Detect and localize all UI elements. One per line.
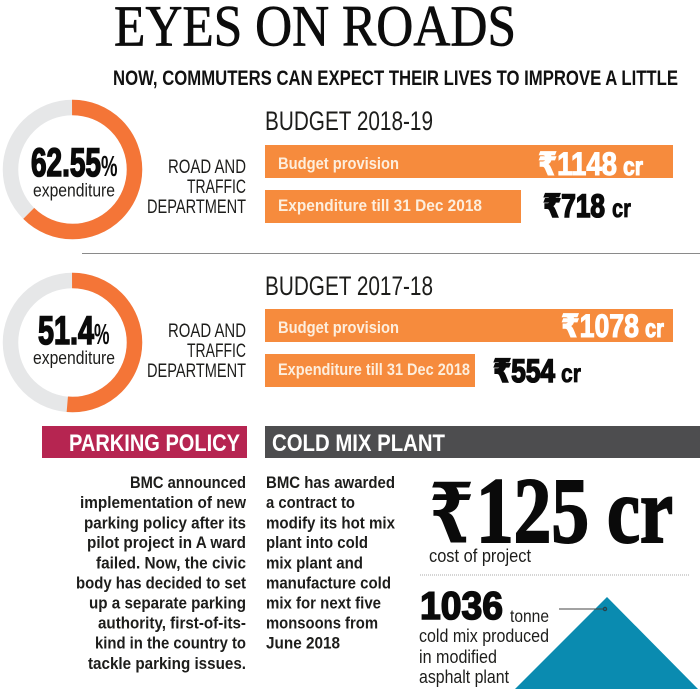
text block: cold mix plant: modify its hot mix <box>266 514 395 532</box>
text block: parking policy: failed. Now, the civic <box>96 554 246 572</box>
icon: asphalt pile triangle <box>515 597 698 689</box>
bar: budget provision 1148 cr: ₹1148 <box>538 146 617 182</box>
text block: cold mix plant: BMC has awarded <box>266 473 395 492</box>
department label: DEPARTMENT <box>147 361 246 382</box>
text block: parking policy: parking policy after its <box>84 514 246 532</box>
text block: cold mix plant: manufacture cold <box>266 574 391 592</box>
donut chart: 51.4% expenditure: 51.4 <box>38 309 95 353</box>
text block: cold mix plant: a contract to <box>266 493 355 512</box>
text block: cold mix plant <box>266 473 395 652</box>
department label <box>147 157 246 218</box>
stat: project cost: cr <box>607 460 673 563</box>
panel: budget 2018-19 <box>10 106 673 232</box>
text block: parking policy: BMC announced <box>130 473 246 492</box>
text block: parking policy: up a separate parking <box>89 594 246 612</box>
text block: cold mix plant: mix for next five <box>266 594 381 612</box>
panel: budget 2017-18 <box>10 271 673 404</box>
text block: parking policy: pilot project in A ward <box>87 533 246 552</box>
text block: cold mix plant: monsoons from <box>266 614 378 632</box>
bar: expenditure 554 cr: Expenditure till 31 Dec 2018 <box>278 360 470 379</box>
heading: cold mix plant: COLD MIX PLANT <box>272 430 445 457</box>
text block: parking policy: authority, first-of-its- <box>98 614 246 632</box>
bar: expenditure 718 cr <box>265 188 631 224</box>
text block: parking policy <box>76 473 247 673</box>
department label: TRAFFIC <box>187 177 246 198</box>
bar: expenditure 554 cr: ₹554 <box>493 353 555 389</box>
heading: budget 2017-18: BUDGET 2017-18 <box>265 271 433 301</box>
donut chart: 51.4% expenditure: % <box>94 319 110 351</box>
leader line <box>559 607 607 611</box>
donut chart: 62.55% expenditure: expenditure <box>33 180 115 200</box>
bar: budget provision 1148 cr: cr <box>623 151 643 181</box>
department label <box>147 321 246 382</box>
bar: expenditure 718 cr: cr <box>612 193 631 223</box>
panel: cold mix plant <box>265 426 700 689</box>
department label: TRAFFIC <box>187 341 246 362</box>
heading: cold mix plant <box>265 426 700 458</box>
donut chart: 62.55% expenditure: % <box>101 151 118 183</box>
stat: cold mix tonnage: cold mix produced <box>419 625 549 646</box>
heading: parking policy <box>42 426 247 458</box>
department label: ROAD AND <box>168 157 246 178</box>
department label: DEPARTMENT <box>147 197 246 218</box>
bar: budget provision 1078 cr <box>265 308 673 344</box>
bar: expenditure 554 cr: cr <box>561 358 581 388</box>
stat: project cost: ₹ <box>430 469 473 560</box>
text block: parking policy: body has decided to set <box>76 574 246 592</box>
stat: project cost: cost of project <box>429 545 531 566</box>
donut chart: 62.55% expenditure: 62.55 <box>31 141 101 185</box>
bar: budget provision 1078 cr: ₹1078 <box>561 308 639 344</box>
bar: expenditure 718 cr: ₹718 <box>543 188 605 224</box>
bar: budget provision 1078 cr: Budget provision <box>278 318 399 337</box>
donut chart: 51.4% expenditure <box>10 280 134 404</box>
stat: cold mix tonnage <box>419 585 549 687</box>
stat: project cost: 125 <box>476 460 589 563</box>
text block: cold mix plant: June 2018 <box>266 634 340 652</box>
text block: parking policy: tackle parking issues. <box>88 654 246 673</box>
stat: project cost <box>429 460 673 566</box>
bar: budget provision 1078 cr: cr <box>645 313 664 343</box>
bar: budget provision 1148 cr <box>265 145 673 182</box>
bar: expenditure 554 cr <box>265 353 581 389</box>
panel: parking policy <box>42 426 247 673</box>
text block: cold mix plant: mix plant and <box>266 554 363 572</box>
text block: cold mix plant: plant into cold <box>266 533 368 552</box>
stat: cold mix tonnage: in modified <box>419 646 497 667</box>
donut chart: 51.4% expenditure: expenditure <box>33 348 115 368</box>
bar: budget provision 1148 cr: Budget provision <box>278 154 399 173</box>
department label: ROAD AND <box>168 321 246 342</box>
heading: parking policy: PARKING POLICY <box>69 430 240 457</box>
text block: parking policy: implementation of new <box>80 493 247 512</box>
heading: budget 2018-19: BUDGET 2018-19 <box>265 106 433 136</box>
bar: expenditure 718 cr: Expenditure till 31 Dec 2018 <box>278 196 482 215</box>
stat: cold mix tonnage: tonne <box>510 606 549 626</box>
stat: cold mix tonnage: 1036 <box>420 585 503 628</box>
donut chart: 62.55% expenditure <box>10 108 134 232</box>
stat: cold mix tonnage: asphalt plant <box>419 666 509 687</box>
text block: parking policy: kind in the country to <box>95 634 246 652</box>
